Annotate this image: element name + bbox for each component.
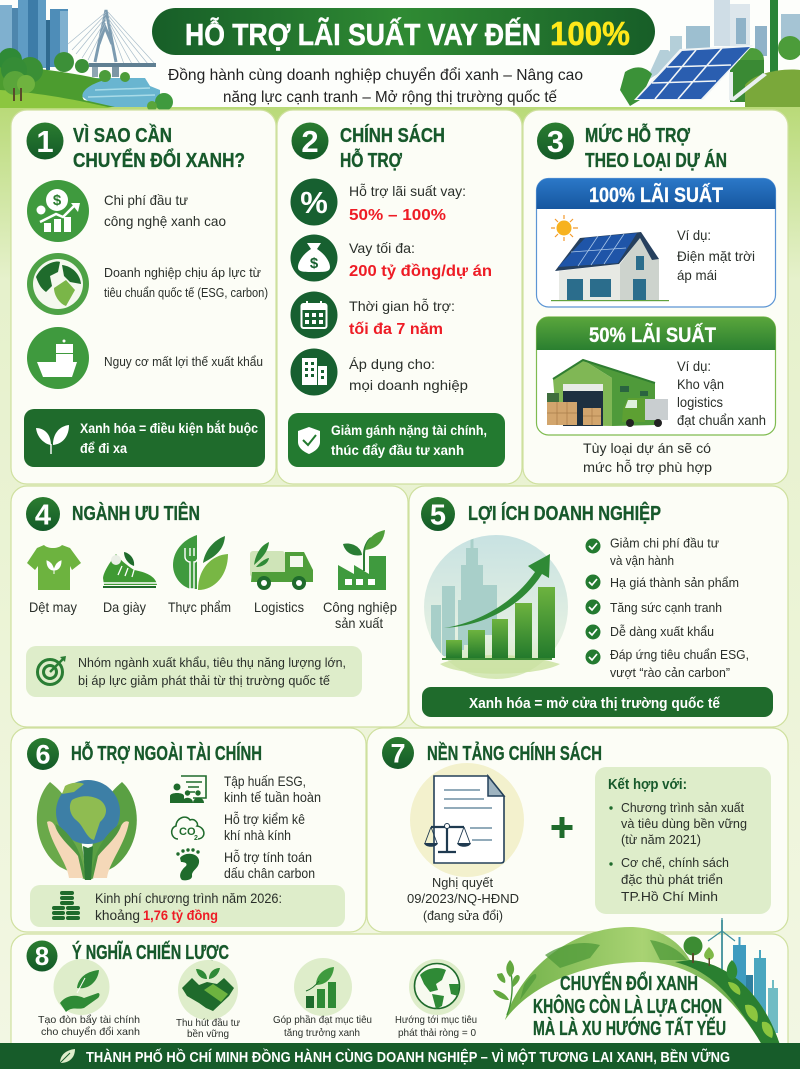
icon: green truck bbox=[250, 542, 313, 590]
number 7 badge bbox=[382, 737, 414, 769]
label: green growth bbox=[273, 1014, 372, 1039]
callout 2: Giảm gánh nặng tài chính, bbox=[331, 422, 487, 438]
icon: t-shirt bbox=[27, 545, 81, 590]
number 4 badge bbox=[26, 497, 60, 532]
icon: CO2 cloud: 2 bbox=[194, 835, 198, 842]
heading 3 bbox=[585, 123, 727, 172]
number 4 badge: 4 bbox=[35, 500, 51, 532]
card: 50% interest: 50% LÃI SUẤT bbox=[589, 324, 716, 347]
slogan: MÀ LÀ XU HƯỚNG TẤT YẾU bbox=[533, 1016, 726, 1040]
sector labels: Dệt may bbox=[29, 599, 77, 615]
text: interest bbox=[349, 183, 466, 224]
wind turbine bbox=[708, 918, 735, 975]
grass bbox=[0, 65, 115, 107]
text: max loan bbox=[349, 240, 492, 280]
slogan: KHÔNG CÒN LÀ LỰA CHỌN bbox=[533, 994, 722, 1018]
panel 4: priority sectors bbox=[11, 486, 408, 727]
text: global standards: Doanh nghiệp chịu áp lực từ bbox=[104, 266, 261, 280]
text: investment cost bbox=[104, 192, 226, 229]
heading 6: HỖ TRỢ NGOÀI TÀI CHÍNH bbox=[71, 741, 262, 765]
panel 7: policy foundation bbox=[367, 728, 788, 932]
text: training: Tập huấn ESG, bbox=[224, 773, 306, 789]
text: emissions inventory: khí nhà kính bbox=[224, 827, 291, 843]
benefits checklist: Tăng sức cạnh tranh bbox=[610, 600, 722, 615]
icon: CO2 cloud bbox=[172, 817, 204, 842]
card: 100% interest: 100% LÃI SUẤT bbox=[589, 184, 723, 207]
number 1 badge: 1 bbox=[36, 124, 54, 159]
title banner: 100% bbox=[550, 15, 630, 52]
icon: money bag bbox=[290, 234, 338, 282]
text: logistics example bbox=[677, 358, 766, 428]
combined-with box: Kết hợp với: bbox=[608, 776, 687, 793]
number 2 badge bbox=[292, 122, 328, 160]
budget box: 1,76 tỷ đồng bbox=[143, 907, 218, 923]
label: attract investment: Thu hút đầu tư bbox=[176, 1017, 240, 1029]
dome band bbox=[505, 927, 780, 1045]
benefits checklist: và vận hành bbox=[610, 553, 674, 568]
text: global standards bbox=[104, 266, 268, 300]
sector labels: Công nghiệp bbox=[323, 599, 397, 615]
label: net zero: Hướng tới mục tiêu bbox=[395, 1014, 477, 1026]
resolution label: 09/2023/NQ-HĐND bbox=[407, 891, 519, 906]
heading 5: LỢI ÍCH DOANH NGHIỆP bbox=[468, 501, 661, 525]
text: applicability: Áp dụng cho: bbox=[349, 356, 435, 372]
icon: investment cost bbox=[27, 180, 89, 242]
number 5 badge: 5 bbox=[430, 500, 446, 532]
text: interest: Hỗ trợ lãi suất vay: bbox=[349, 183, 466, 199]
panel 1: why go green bbox=[11, 110, 276, 484]
callout 2 bbox=[288, 413, 505, 467]
panel 6: non-financial support bbox=[11, 728, 366, 932]
dome white interior bbox=[505, 962, 762, 1045]
combined-with box: Chương trình sản xuất bbox=[621, 800, 744, 815]
heading 2: CHÍNH SÁCH bbox=[340, 124, 445, 147]
callout 1 bbox=[24, 409, 265, 467]
label: attract investment: bền vững bbox=[187, 1028, 229, 1040]
number 8 badge bbox=[26, 940, 58, 972]
subtitle: năng lực cạnh tranh – Mở rộng thị trường quốc tế bbox=[223, 89, 557, 106]
sector labels: sản xuất bbox=[335, 615, 383, 631]
sector labels bbox=[29, 599, 397, 631]
number 6 badge: 6 bbox=[35, 740, 51, 770]
combined-with box bbox=[595, 767, 771, 914]
note 3: mức hỗ trợ phù hợp bbox=[583, 459, 712, 475]
text: emissions inventory bbox=[224, 811, 305, 843]
footer banner: THÀNH PHỐ HỒ CHÍ MINH ĐỒNG HÀNH CÙNG DOANH NGHIỆP – VÌ MỘT TƯƠNG LAI XANH, BỀN VỮNG bbox=[86, 1048, 730, 1066]
resolution label: Nghị quyết bbox=[432, 875, 493, 890]
illustration: globe in leaves and hands bbox=[37, 780, 137, 880]
callout 1: để đi xa bbox=[80, 440, 127, 456]
resolution label: (đang sửa đổi) bbox=[423, 908, 503, 923]
icon: house with solar roof bbox=[551, 232, 669, 301]
subtitle bbox=[168, 66, 583, 106]
icon: cargo ship bbox=[27, 327, 89, 389]
callout 5 bbox=[422, 687, 773, 717]
combined-with box: (từ năm 2021) bbox=[621, 832, 701, 847]
icon: training bbox=[170, 776, 206, 803]
combined-with box: Cơ chế, chính sách bbox=[621, 855, 729, 870]
header illustration: city, bridge and river bbox=[0, 0, 173, 111]
icon: globe bbox=[409, 959, 465, 1015]
leaf sprig bbox=[493, 960, 520, 1015]
footer banner bbox=[0, 1043, 800, 1069]
text: solar example: áp mái bbox=[677, 267, 717, 283]
benefits checklist: Hạ giá thành sản phẩm bbox=[610, 575, 739, 590]
bridge bbox=[95, 10, 116, 62]
icon: percent bbox=[290, 178, 338, 226]
number 3 badge bbox=[537, 122, 574, 160]
combined-with box: TP.Hồ Chí Minh bbox=[621, 889, 718, 904]
budget box: khoảng bbox=[95, 907, 140, 923]
note 4 bbox=[26, 646, 362, 697]
sector labels: Thực phẩm bbox=[168, 599, 231, 615]
label: green growth: tăng trưởng xanh bbox=[284, 1027, 360, 1039]
text: export risk: Nguy cơ mất lợi thế xuất khẩu bbox=[104, 355, 263, 369]
icon: handshake with sprout bbox=[178, 960, 238, 1020]
note 4: bị áp lực giảm phát thải từ thị trường quốc tế bbox=[78, 673, 331, 688]
text: solar example bbox=[677, 227, 755, 283]
number 8 badge: 8 bbox=[35, 941, 49, 971]
heading 2: HỖ TRỢ bbox=[340, 148, 403, 172]
chart illustration: growth over city bbox=[424, 535, 568, 679]
icon: CO2 cloud: CO bbox=[179, 826, 196, 838]
number 1 badge bbox=[26, 122, 64, 160]
label: financial lever: Tạo đòn bẩy tài chính bbox=[38, 1014, 140, 1026]
benefits checklist: vượt “rào cản carbon” bbox=[610, 665, 730, 680]
number 5 badge bbox=[421, 497, 455, 532]
heading 1 bbox=[73, 124, 245, 172]
note 3: Tùy loại dự án sẽ có bbox=[583, 440, 711, 456]
number 2 badge: 2 bbox=[301, 124, 319, 159]
panel 3: support level by project type bbox=[523, 110, 788, 484]
label: green growth: Góp phần đạt mục tiêu bbox=[273, 1014, 372, 1026]
callout 2: thúc đẩy đầu tư xanh bbox=[331, 442, 464, 458]
text: applicability: mọi doanh nghiệp bbox=[349, 377, 468, 393]
combined-with box: và tiêu dùng bền vững bbox=[621, 816, 747, 831]
text: logistics example: Kho vận bbox=[677, 376, 724, 392]
icon: buildings bbox=[290, 348, 338, 396]
combined-with box: đặc thù phát triển bbox=[621, 872, 723, 887]
number 3 badge: 3 bbox=[547, 124, 564, 159]
icon: calendar bbox=[290, 292, 338, 338]
heading 3: MỨC HỖ TRỢ bbox=[585, 123, 691, 147]
budget box bbox=[30, 885, 345, 927]
panel 2: support policy bbox=[277, 110, 522, 484]
trees on dome bbox=[684, 936, 737, 980]
text: logistics example: Ví dụ: bbox=[677, 358, 711, 374]
slogan bbox=[533, 971, 726, 1040]
icon: food bbox=[173, 535, 228, 590]
heading 1: CHUYỂN ĐỔI XANH? bbox=[73, 148, 245, 172]
heading 8: Ý NGHĨA CHIẾN LƯỢC bbox=[72, 940, 229, 964]
card: 50% interest bbox=[536, 317, 776, 435]
heading 7: NỀN TẢNG CHÍNH SÁCH bbox=[427, 742, 602, 765]
icon: resolution document with scales bbox=[410, 763, 524, 877]
icon: sun bbox=[551, 215, 578, 241]
text: solar example: Điện mặt trời bbox=[677, 248, 755, 264]
card: 100% interest bbox=[536, 178, 776, 307]
text: max loan: Vay tối đa: bbox=[349, 240, 415, 256]
heading 3: THEO LOẠI DỰ ÁN bbox=[585, 149, 727, 172]
text: training: kinh tế tuần hoàn bbox=[224, 789, 321, 805]
icon: investment cost: $ bbox=[53, 192, 62, 209]
label: net zero bbox=[395, 1014, 477, 1039]
text: logistics example: logistics bbox=[677, 394, 723, 410]
illustration: green globe dome with city bbox=[493, 918, 780, 1045]
icon: shoe bbox=[102, 552, 158, 587]
text: carbon footprint: dấu chân carbon bbox=[224, 865, 315, 881]
title banner: HỖ TRỢ LÃI SUẤT VAY ĐẾN bbox=[185, 16, 541, 52]
sector labels: Logistics bbox=[254, 599, 304, 615]
label: financial lever bbox=[38, 1014, 140, 1038]
icon: money bag: $ bbox=[310, 255, 319, 272]
trees bbox=[0, 48, 22, 72]
number 6 badge bbox=[27, 738, 59, 770]
benefits checklist: Giảm chi phí đầu tư bbox=[610, 536, 719, 550]
text: investment cost: Chi phí đầu tư bbox=[104, 192, 188, 208]
text: interest: 50% – 100% bbox=[349, 207, 446, 224]
header illustration: solar panels, skyline and trees bbox=[620, 0, 800, 107]
title banner bbox=[152, 8, 655, 55]
text: investment cost: công nghệ xanh cao bbox=[104, 213, 226, 229]
callout 1: Xanh hóa = điều kiện bắt buộc bbox=[80, 419, 258, 436]
benefits checklist: Dễ dàng xuất khẩu bbox=[610, 624, 714, 639]
resolution label bbox=[407, 875, 519, 923]
benefits checklist bbox=[586, 536, 749, 680]
river bbox=[80, 78, 160, 107]
slogan: CHUYỂN ĐỔI XANH bbox=[560, 971, 698, 995]
icon: percent: % bbox=[300, 185, 328, 220]
label: attract investment bbox=[176, 1017, 240, 1040]
text: carbon footprint: Hỗ trợ tính toán bbox=[224, 849, 312, 865]
subtitle: Đồng hành cùng doanh nghiệp chuyển đổi xanh – Nâng cao bbox=[168, 66, 583, 84]
heading 2 bbox=[340, 124, 445, 172]
icon: hand and leaf bbox=[54, 959, 110, 1015]
icon: plus bbox=[552, 817, 572, 838]
skyscrapers bbox=[733, 937, 778, 1033]
text: applicability bbox=[349, 356, 468, 393]
icon: leaf and bars bbox=[294, 958, 352, 1016]
heading 1: VÌ SAO CẦN bbox=[73, 124, 172, 147]
benefits checklist: Đáp ứng tiêu chuẩn ESG, bbox=[610, 647, 749, 662]
text: training bbox=[224, 773, 321, 805]
panel 8: strategic meaning bbox=[11, 934, 788, 1059]
label: financial lever: cho chuyển đổi xanh bbox=[41, 1026, 140, 1038]
label: net zero: phát thải ròng = 0 bbox=[398, 1027, 476, 1039]
icon: green warehouse and truck bbox=[547, 360, 668, 427]
text: logistics example: đạt chuẩn xanh bbox=[677, 412, 766, 428]
budget box: Kinh phí chương trình năm 2026: bbox=[95, 890, 282, 906]
text: solar example: Ví dụ: bbox=[677, 227, 711, 243]
number 7 badge: 7 bbox=[390, 738, 406, 768]
text: max loan: 200 tỷ đồng/dự án bbox=[349, 263, 492, 280]
note 3 bbox=[583, 440, 712, 475]
note 4: Nhóm ngành xuất khẩu, tiêu thụ năng lượng lớn, bbox=[78, 655, 346, 670]
sector labels: Da giày bbox=[103, 599, 146, 615]
text: carbon footprint bbox=[224, 849, 315, 881]
icon: globe pressure bbox=[27, 253, 89, 315]
text: duration: tối đa 7 năm bbox=[349, 321, 443, 338]
icon: footprint bbox=[176, 848, 200, 880]
panel 5: business benefits bbox=[409, 486, 788, 727]
text: emissions inventory: Hỗ trợ kiểm kê bbox=[224, 811, 305, 827]
text: duration: Thời gian hỗ trợ: bbox=[349, 298, 455, 314]
text: global standards: tiêu chuẩn quốc tế (ESG, carbon) bbox=[104, 286, 268, 300]
icon: factory with sprout bbox=[338, 530, 386, 590]
heading 4: NGÀNH ƯU TIÊN bbox=[72, 501, 200, 525]
callout 5: Xanh hóa = mở cửa thị trường quốc tế bbox=[469, 695, 721, 712]
text: duration bbox=[349, 298, 455, 338]
